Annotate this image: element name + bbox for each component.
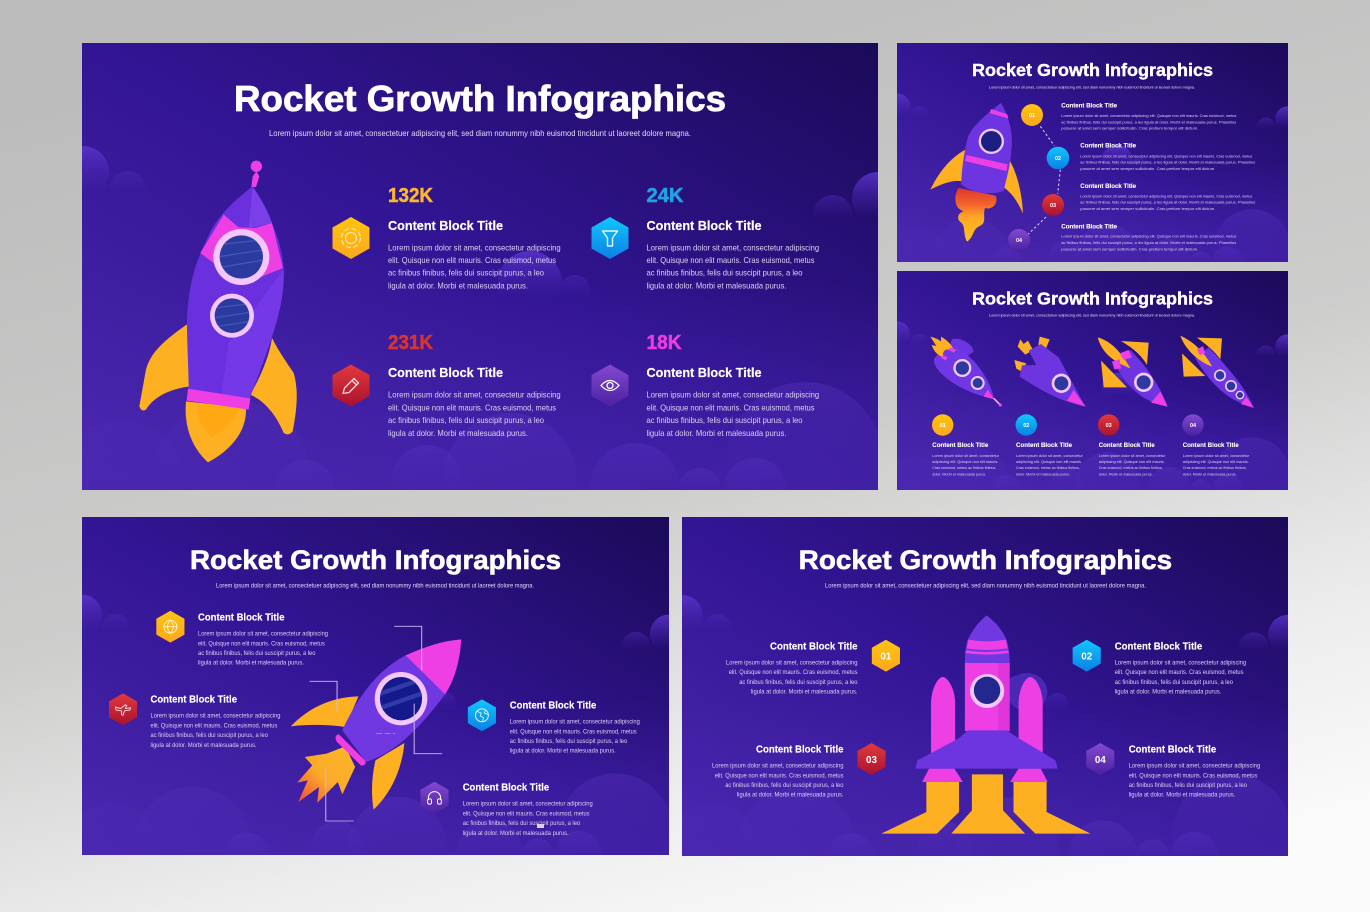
block: 18K — [592, 332, 819, 438]
title: Rocket Growth Infographics — [972, 288, 1213, 308]
step marker 03: 03 — [1050, 203, 1056, 209]
block: left: elit. Quisque non elit mauris. Cras euismod, metus — [150, 722, 277, 729]
block 04: Lorem ipsum dolor sit amet, consectetur adipiscing — [1129, 762, 1261, 769]
icon: earth on blue hexagon — [468, 699, 496, 731]
step marker 02: 02 — [1055, 156, 1061, 162]
column 2: adipiscing elit. Quisque non elit mauris. — [1016, 459, 1082, 464]
subtitle: Lorem ipsum dolor sit amet, consectetuer adipiscing elit, sed diam nonummy nibh euismod tincidunt ut laoreet dolore magna. — [269, 128, 691, 138]
block 02: Content Block Title — [1115, 641, 1203, 652]
column 4: Cras euismod, metus ac finibus finibus, — [1183, 465, 1247, 470]
body text: ac finibus finibus, felis dui suscipit purus, a leo — [646, 415, 803, 425]
step 2 text: posuere at amet sem semper sollicitudin. Cras pretium tempor elit dictum. — [1080, 166, 1215, 171]
column 2 — [1016, 414, 1083, 476]
step 1 text: ac finibus finibus, felis dui suscipit purus, a leo ligula at dolor. Morbi et malesuada purus. Phasellus — [1061, 119, 1236, 124]
hexagon badge 04: 04 — [1095, 755, 1106, 766]
step 1 text — [1061, 102, 1236, 131]
block 04 — [1086, 743, 1261, 799]
block: top left: ligula at dolor. Morbi et malesuada purus. — [198, 660, 304, 667]
block 02 — [1073, 640, 1247, 696]
block: right: ligula at dolor. Morbi et malesuada purus. — [510, 748, 616, 755]
rocket B — [1014, 337, 1086, 407]
block: bottom right: Lorem ipsum dolor sit amet, consectetur adipiscing — [463, 801, 593, 808]
step 4 text: ac finibus finibus, felis dui suscipit purus, a leo ligula at dolor. Morbi et malesuada purus. Phasellus — [1061, 240, 1236, 245]
panel background — [82, 43, 878, 490]
step 3 text — [1080, 183, 1255, 211]
icon: funnel on blue hexagon — [592, 217, 628, 259]
block 03: elit. Quisque non elit mauris. Cras euismod, metus — [715, 772, 844, 779]
column 1: Lorem ipsum dolor sit amet, consectetur — [932, 453, 1000, 458]
step marker 01: 01 — [1029, 113, 1035, 119]
icon: coin on yellow hexagon — [332, 217, 370, 259]
column 1: Cras euismod, metus ac finibus finibus, — [932, 465, 996, 470]
column 3: adipiscing elit. Quisque non elit mauris. — [1099, 459, 1165, 464]
block heading: Content Block Title — [388, 365, 503, 380]
step marker 01 — [1021, 104, 1043, 126]
panel: main slide with four statistics — [82, 43, 878, 490]
block: top left: Content Block Title — [198, 612, 285, 624]
subtitle: Lorem ipsum dolor sit amet, consectetuer adipiscing elit, sed diam nonummy nibh euismod tincidunt ut laoreet dolore magna. — [989, 313, 1195, 318]
column 4: adipiscing elit. Quisque non elit mauris. — [1183, 459, 1249, 464]
step marker 03 — [1042, 194, 1064, 216]
body text: Lorem ipsum dolor sit amet, consectetur adipiscing — [388, 242, 561, 252]
panel background — [897, 43, 1288, 262]
body text: elit. Quisque non elit mauris. Cras euismod, metus — [388, 402, 556, 412]
column 1: Content Block Title — [932, 442, 989, 449]
body text: elit. Quisque non elit mauris. Cras euismod, metus — [646, 402, 814, 412]
block: top left: Lorem ipsum dolor sit amet, consectetur adipiscing — [198, 631, 328, 638]
column 4: dolor. Morbi et malesuada purus. — [1183, 471, 1237, 476]
body text: elit. Quisque non elit mauris. Cras euismod, metus — [646, 255, 814, 265]
block: left: Lorem ipsum dolor sit amet, consectetur adipiscing — [150, 713, 281, 720]
block: left: Content Block Title — [150, 695, 238, 706]
block: 24K — [592, 185, 819, 291]
block heading: Content Block Title — [388, 218, 503, 233]
step 1 text: Content Block Title — [1061, 102, 1118, 109]
timeline: dotted connector — [1028, 126, 1060, 235]
step 4 text: posuere at amet sem semper sollicitudin. Cras pretium tempor elit dictum. — [1061, 246, 1198, 251]
small artifact mark — [537, 824, 544, 828]
step 3 text: Lorem ipsum dolor sit amet, consectetur adipiscing elit. Quisque non elit mauris. Cras euismod, metus — [1080, 193, 1252, 198]
block: bottom right — [420, 782, 593, 837]
block: right — [468, 699, 640, 755]
block 01: elit. Quisque non elit mauris. Cras euismod, metus — [729, 669, 858, 676]
panel background — [682, 517, 1288, 856]
icon: headset on purple hexagon — [420, 782, 449, 814]
block: top left — [156, 611, 328, 667]
column 3: Content Block Title — [1099, 442, 1155, 449]
stat value: 231K — [388, 332, 434, 354]
block: right: ac finibus finibus, felis dui suscipit purus, a leo — [510, 738, 628, 745]
leader lines — [310, 626, 442, 821]
icon: plane on red hexagon — [109, 693, 137, 725]
column 2: Lorem ipsum dolor sit amet, consectetur — [1016, 453, 1083, 458]
block: bottom right: elit. Quisque non elit mauris. Cras euismod, metus — [463, 810, 590, 817]
hexagon badge 04 — [1086, 743, 1114, 775]
body text: ligula at dolor. Morbi et malesuada purus. — [646, 281, 786, 291]
block 02: ac finibus finibus, felis dui suscipit purus, a leo — [1115, 679, 1233, 686]
body text: ligula at dolor. Morbi et malesuada purus. — [646, 428, 786, 438]
column 1: 01 — [940, 423, 946, 429]
block: bottom right: ligula at dolor. Morbi et malesuada purus. — [463, 830, 569, 837]
block heading: Content Block Title — [646, 218, 762, 233]
column 3: 03 — [1106, 423, 1112, 429]
step marker 04 — [1008, 229, 1030, 251]
column 3: dolor. Morbi et malesuada purus. — [1099, 471, 1153, 476]
body text: ac finibus finibus, felis dui suscipit purus, a leo — [646, 268, 803, 278]
panel: space shuttle slide — [663, 517, 1308, 909]
column 4: Content Block Title — [1183, 442, 1239, 449]
title: Rocket Growth Infographics — [972, 60, 1213, 80]
step marker 04: 04 — [1016, 238, 1023, 244]
block: right: elit. Quisque non elit mauris. Cras euismod, metus — [510, 728, 637, 735]
step 2 text: ac finibus finibus, felis dui suscipit purus, a leo ligula at dolor. Morbi et malesuada purus. Phasellus — [1080, 160, 1255, 165]
block: left: ac finibus finibus, felis dui suscipit purus, a leo — [150, 732, 268, 739]
block 03: Lorem ipsum dolor sit amet, consectetur adipiscing — [712, 762, 844, 769]
block: 231K — [332, 332, 561, 438]
column 3: Lorem ipsum dolor sit amet, consectetur — [1099, 453, 1166, 458]
hexagon badge 02 — [1073, 640, 1101, 672]
block: right: Lorem ipsum dolor sit amet, consectetur adipiscing — [510, 719, 640, 726]
block 04: Content Block Title — [1129, 744, 1217, 755]
title: Rocket Growth Infographics — [234, 78, 726, 119]
block: top left: ac finibus finibus, felis dui suscipit purus, a leo — [198, 650, 316, 657]
step 4 text: Content Block Title — [1061, 223, 1118, 230]
step 3 text: Content Block Title — [1080, 183, 1137, 190]
step 3 text: ac finibus finibus, felis dui suscipit purus, a leo ligula at dolor. Morbi et malesuada purus. Phasellus — [1080, 200, 1255, 205]
icon: pencil on red hexagon — [332, 364, 370, 406]
rocket illustration: shuttle with boosters — [881, 615, 1091, 834]
column 4: Lorem ipsum dolor sit amet, consectetur — [1183, 453, 1250, 458]
column 1: adipiscing elit. Quisque non elit mauris. — [932, 459, 998, 464]
block 02: ligula at dolor. Morbi et malesuada purus. — [1115, 689, 1222, 696]
block heading: Content Block Title — [646, 365, 762, 380]
body text: Lorem ipsum dolor sit amet, consectetur adipiscing — [388, 390, 561, 400]
column 2: dolor. Morbi et malesuada purus. — [1016, 471, 1070, 476]
column 2: Content Block Title — [1016, 442, 1073, 449]
panel background — [82, 517, 669, 855]
step 2 text — [1080, 143, 1255, 171]
body text: Lorem ipsum dolor sit amet, consectetur adipiscing — [646, 242, 819, 252]
hexagon badge 01 — [872, 640, 900, 672]
block 03: Content Block Title — [756, 744, 844, 755]
title: Rocket Growth Infographics — [190, 545, 561, 575]
subtitle: Lorem ipsum dolor sit amet, consectetuer adipiscing elit, sed diam nonummy nibh euismod tincidunt ut laoreet dolore magna. — [216, 582, 534, 589]
icon: globe on yellow hexagon — [156, 611, 184, 643]
block 04: ac finibus finibus, felis dui suscipit purus, a leo — [1129, 782, 1247, 789]
body text — [646, 390, 819, 438]
hexagon badge 01: 01 — [880, 652, 892, 663]
block 02: elit. Quisque non elit mauris. Cras euismod, metus — [1115, 669, 1244, 676]
block: bottom right: ac finibus finibus, felis dui suscipit purus, a leo — [463, 820, 581, 827]
stat value: 132K — [388, 185, 434, 207]
rocket A — [930, 337, 1002, 407]
rocket D — [1180, 336, 1254, 408]
block: bottom right: Content Block Title — [463, 783, 550, 794]
block: left — [109, 693, 281, 749]
icon: eye on purple hexagon — [592, 364, 628, 406]
subtitle: Lorem ipsum dolor sit amet, consectetuer adipiscing elit, sed diam nonummy nibh euismod tincidunt ut laoreet dolore magna. — [825, 582, 1146, 589]
block: left: ligula at dolor. Morbi et malesuada purus. — [150, 742, 257, 749]
column 2: Cras euismod, metus ac finibus finibus, — [1016, 465, 1080, 470]
step 3 text: posuere at amet sem semper sollicitudin. Cras pretium tempor elit dictum. — [1080, 206, 1215, 211]
column 1 — [932, 414, 1000, 476]
body text: ac finibus finibus, felis dui suscipit purus, a leo — [388, 268, 544, 278]
column 4 — [1182, 414, 1250, 476]
block 03 — [712, 743, 886, 799]
panel: diagonal rocket slide — [82, 517, 669, 855]
hexagon badge 02: 02 — [1081, 652, 1093, 663]
body text — [388, 242, 561, 291]
body text — [388, 390, 561, 438]
title: Rocket Growth Infographics — [799, 545, 1172, 575]
block 01: Content Block Title — [770, 641, 858, 652]
block 04: ligula at dolor. Morbi et malesuada purus. — [1129, 792, 1236, 799]
body text — [646, 242, 819, 291]
block 01 — [726, 640, 900, 696]
body text: ac finibus finibus, felis dui suscipit purus, a leo — [388, 415, 544, 425]
body text: ligula at dolor. Morbi et malesuada purus. — [388, 428, 528, 438]
subtitle: Lorem ipsum dolor sit amet, consectetuer adipiscing elit, sed diam nonummy nibh euismod tincidunt ut laoreet dolore magna. — [989, 84, 1195, 89]
hexagon badge 03: 03 — [866, 755, 877, 766]
column 1: dolor. Morbi et malesuada purus. — [932, 471, 986, 476]
panel: four rockets slide — [885, 271, 1301, 524]
block 02: Lorem ipsum dolor sit amet, consectetur adipiscing — [1115, 659, 1247, 666]
rocket illustration: tilted with flame — [930, 103, 1023, 242]
column 4: 04 — [1190, 423, 1197, 429]
step 4 text: Lorem ipsum dolor sit amet, consectetur adipiscing elit. Quisque non elit mauris. Cras euismod, metus — [1061, 234, 1236, 239]
stat value: 18K — [646, 332, 682, 354]
body text: ligula at dolor. Morbi et malesuada purus. — [388, 281, 528, 291]
panel background — [897, 271, 1288, 490]
block 03: ac finibus finibus, felis dui suscipit purus, a leo — [725, 782, 844, 789]
hexagon badge 03 — [857, 743, 886, 775]
column 3: Cras euismod, metus ac finibus finibus, — [1099, 465, 1163, 470]
stat value: 24K — [646, 185, 684, 207]
block 01: ac finibus finibus, felis dui suscipit purus, a leo — [739, 679, 858, 686]
column 3 — [1098, 414, 1166, 476]
rocket illustration: diagonal — [291, 639, 461, 810]
body text: Lorem ipsum dolor sit amet, consectetur adipiscing — [646, 390, 819, 400]
block: top left: elit. Quisque non elit mauris. Cras euismod, metus — [198, 640, 325, 647]
block: right: Content Block Title — [510, 700, 597, 712]
step 2 text: Content Block Title — [1080, 143, 1137, 150]
block 01: ligula at dolor. Morbi et malesuada purus. — [751, 689, 858, 696]
block 04: elit. Quisque non elit mauris. Cras euismod, metus — [1129, 772, 1258, 779]
step 2 text: Lorem ipsum dolor sit amet, consectetur adipiscing elit. Quisque non elit mauris. Cras euismod, metus — [1080, 153, 1252, 158]
panel: timeline slide with numbered steps — [885, 43, 1301, 296]
rocket illustration: upright — [139, 161, 297, 462]
step 1 text: posuere at amet sem semper sollicitudin. Cras pretium tempor elit dictum. — [1061, 126, 1198, 131]
block: 132K — [332, 185, 561, 291]
step marker 02 — [1047, 147, 1069, 169]
step 1 text: Lorem ipsum dolor sit amet, consectetur adipiscing elit. Quisque non elit mauris. Cras euismod, metus — [1061, 113, 1236, 118]
block 01: Lorem ipsum dolor sit amet, consectetur adipiscing — [726, 659, 858, 666]
step 4 text — [1061, 223, 1236, 251]
body text: elit. Quisque non elit mauris. Cras euismod, metus — [388, 255, 556, 265]
column 2: 02 — [1023, 423, 1029, 429]
rocket C — [1098, 337, 1168, 407]
block 03: ligula at dolor. Morbi et malesuada purus. — [737, 792, 844, 799]
